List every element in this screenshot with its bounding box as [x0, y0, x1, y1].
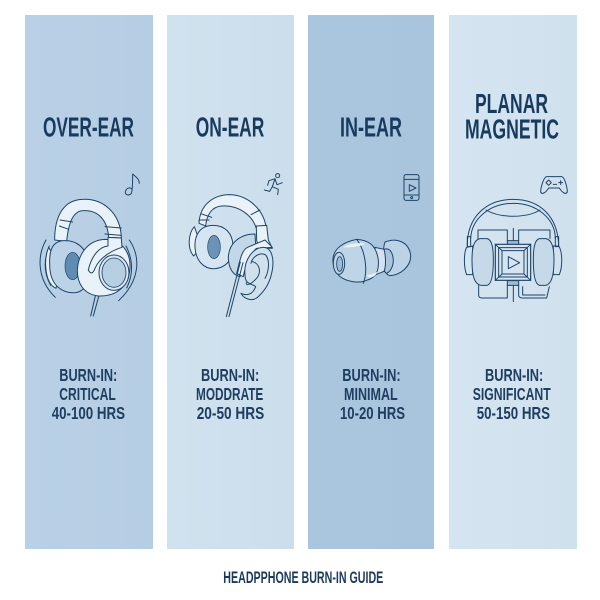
- text: over-ear burn-in: [52, 365, 125, 423]
- text: on-ear burn-in: BURN-IN:: [201, 365, 259, 385]
- icon: runner: [264, 174, 282, 195]
- heading: in-ear: IN-EAR: [340, 112, 402, 142]
- footer title: HEADPPHONE BURN-IN GUIDE: [223, 568, 383, 587]
- text: in-ear burn-in: MINIMAL: [344, 384, 398, 404]
- icon: over-ear headphones: [40, 199, 137, 316]
- text: over-ear burn-in: CRITICAL: [59, 384, 116, 404]
- text: in-ear burn-in: [340, 365, 405, 423]
- panel: in-ear: [308, 15, 434, 549]
- heading: on-ear: ON-EAR: [196, 112, 264, 142]
- text: planar burn-in: SIGNIFICANT: [473, 384, 551, 404]
- icon: phone with play symbol: [404, 175, 419, 200]
- panel: over-ear: [25, 15, 153, 549]
- heading: planar magnetic: [465, 88, 559, 144]
- text: on-ear burn-in: 20-50 HRS: [197, 403, 264, 423]
- heading: planar magnetic: PLANAR: [475, 88, 548, 119]
- text: on-ear burn-in: MODDRATE: [196, 384, 263, 404]
- text: in-ear burn-in: 10-20 HRS: [340, 403, 405, 423]
- icon: on-ear headphones with ear: [189, 195, 273, 317]
- heading: over-ear: OVER-EAR: [43, 112, 134, 142]
- text: planar burn-in: [473, 365, 551, 423]
- text: in-ear burn-in: BURN-IN:: [342, 365, 401, 385]
- icon: game controller: [541, 177, 567, 193]
- text: on-ear burn-in: [196, 365, 264, 423]
- panel: planar magnetic: [449, 15, 577, 549]
- icon: planar headphones: [464, 199, 562, 302]
- icon: in-ear bud: [333, 239, 411, 283]
- text: over-ear burn-in: 40-100 HRS: [52, 403, 125, 423]
- text: planar burn-in: 50-150 HRS: [477, 403, 550, 423]
- panel: on-ear: [167, 15, 294, 549]
- text: planar burn-in: BURN-IN:: [485, 365, 543, 385]
- icon: music note: [125, 174, 139, 195]
- text: over-ear burn-in: BURN-IN:: [59, 365, 117, 385]
